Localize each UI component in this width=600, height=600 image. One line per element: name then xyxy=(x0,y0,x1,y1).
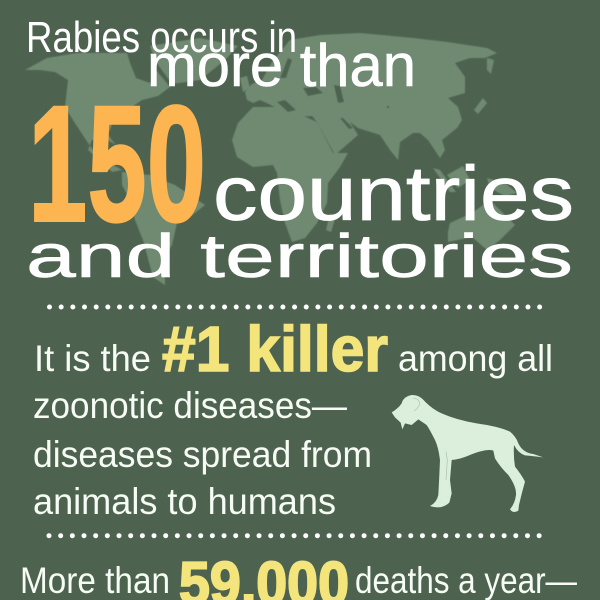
inner seas xyxy=(277,58,389,129)
big number: 150: 150 xyxy=(28,72,206,257)
heading: and territories: and territories xyxy=(26,222,573,290)
dotted divider 1 xyxy=(50,304,540,310)
text block: #1 killer: diseases spread from xyxy=(33,434,372,475)
heading: Rabies occurs in: Rabies occurs in xyxy=(26,13,297,62)
text block: #1 killer xyxy=(33,313,553,522)
text block: #1 killer: zoonotic diseases— xyxy=(33,385,347,426)
highlight: #1 killer: #1 killer xyxy=(162,313,388,385)
dotted divider 2 xyxy=(49,533,540,538)
text block: #1 killer: among all xyxy=(398,338,553,379)
text block: deaths a year: More than xyxy=(20,560,170,600)
world map xyxy=(25,33,543,285)
heading: more than: more than xyxy=(147,32,416,99)
icon: dog silhouette xyxy=(392,395,543,512)
text block: deaths a year xyxy=(20,550,577,600)
heading: countries: countries xyxy=(213,151,574,237)
text block: #1 killer: It is the xyxy=(34,338,151,379)
text block: #1 killer: animals to humans xyxy=(33,481,336,522)
